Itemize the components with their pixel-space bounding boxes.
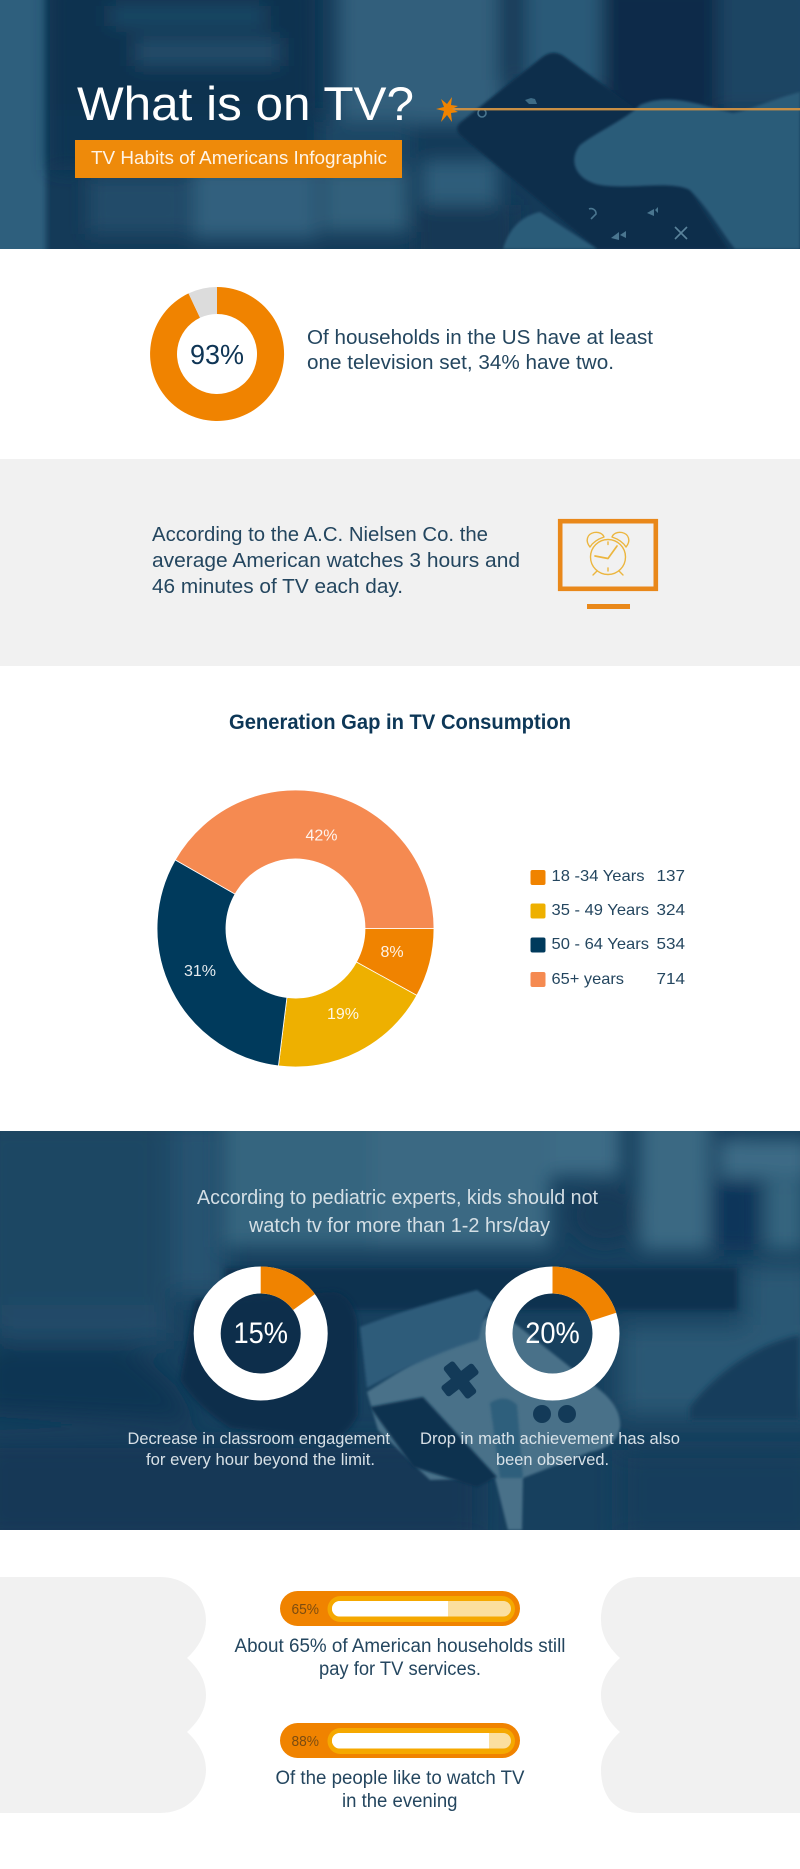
progress bar: 88%: 88% xyxy=(292,1734,319,1750)
panel: households xyxy=(150,287,653,421)
legend: 65+ years xyxy=(552,971,624,988)
hand on controller xyxy=(360,1290,495,1388)
donut chart: 93% xyxy=(150,287,284,421)
text: 65% households: pay for TV services. xyxy=(319,1659,481,1680)
donut: 20% xyxy=(486,1266,620,1400)
caption: classroom engagement: for every hour beyond the limit. xyxy=(146,1450,375,1469)
intro text xyxy=(197,1187,598,1237)
controller buttons xyxy=(533,1405,551,1423)
subtitle tag xyxy=(75,140,402,178)
legend: 324 xyxy=(656,902,685,919)
subtitle tag: TV Habits of Americans Infographic xyxy=(91,148,387,168)
controller xyxy=(367,1310,620,1530)
text: 88% evening xyxy=(276,1768,525,1812)
legend: 50 - 64 Years xyxy=(552,936,649,953)
text block xyxy=(152,524,520,598)
legend: 137 xyxy=(656,868,685,885)
donut: 15%: 15% xyxy=(233,1317,288,1350)
caption: math achievement: Drop in math achievement has also xyxy=(420,1429,680,1448)
caption: math achievement: been observed. xyxy=(496,1450,609,1469)
panel: daily viewing xyxy=(0,459,800,666)
intro text: According to pediatric experts, kids should not xyxy=(197,1187,598,1209)
text block: According to the A.C. Nielsen Co. the xyxy=(152,524,488,546)
orange line with star xyxy=(436,97,800,122)
text block xyxy=(307,327,653,374)
text: 88% evening: Of the people like to watch TV xyxy=(276,1768,525,1789)
legend xyxy=(530,868,685,988)
text: 65% households xyxy=(234,1636,566,1680)
chart labels: 31% xyxy=(184,963,216,980)
legend: 534 xyxy=(656,936,685,953)
panel: header xyxy=(0,0,800,270)
caption: classroom engagement xyxy=(128,1429,390,1469)
dark shelf xyxy=(225,1268,737,1310)
title: What is on TV? xyxy=(77,77,414,130)
legend: 18 -34 Years xyxy=(552,868,644,885)
caption: math achievement xyxy=(420,1429,680,1469)
chart labels: 19% xyxy=(327,1006,359,1023)
icon: tv with alarm clock xyxy=(560,521,656,609)
text block: average American watches 3 hours and xyxy=(152,550,520,572)
chart labels xyxy=(184,828,404,1023)
left scalloped shape xyxy=(0,1577,206,1813)
dark sleeve xyxy=(180,1292,358,1440)
donut chart xyxy=(157,790,434,1067)
header photo: hand holding remote xyxy=(0,0,800,270)
intro text: watch tv for more than 1-2 hrs/day xyxy=(248,1215,550,1237)
progress bar: 65% xyxy=(280,1591,520,1626)
progress bar: 65%: 65% xyxy=(292,1602,319,1618)
donut: 20%: 20% xyxy=(525,1317,580,1350)
chart labels: 42% xyxy=(305,828,338,844)
panel: pediatric experts xyxy=(0,1115,800,1540)
text: 88% evening: in the evening xyxy=(342,1791,458,1812)
remote buttons xyxy=(478,109,687,239)
donut chart: 93%: 93% xyxy=(190,339,244,370)
text: 65% households: About 65% of American households still xyxy=(234,1636,566,1657)
panel: bottom statistics xyxy=(0,1577,800,1813)
donut: 15% xyxy=(194,1266,328,1400)
text block: 46 minutes of TV each day. xyxy=(152,576,403,598)
hand xyxy=(574,92,800,249)
background photo: hands holding game controller xyxy=(0,1115,800,1540)
progress bar: 88% xyxy=(280,1723,520,1758)
text block: one television set, 34% have two. xyxy=(307,352,614,374)
legend: 35 - 49 Years xyxy=(552,902,649,919)
panel: generation gap xyxy=(157,711,685,1067)
caption: classroom engagement: Decrease in classroom engagement xyxy=(128,1429,390,1448)
heading: Generation Gap in TV Consumption xyxy=(229,711,571,734)
legend: 714 xyxy=(656,971,685,988)
text block: Of households in the US have at least xyxy=(307,327,653,349)
remote xyxy=(457,53,728,249)
right scalloped shape xyxy=(601,1577,800,1813)
chart labels: 8% xyxy=(380,944,404,961)
d-pad xyxy=(442,1362,478,1398)
